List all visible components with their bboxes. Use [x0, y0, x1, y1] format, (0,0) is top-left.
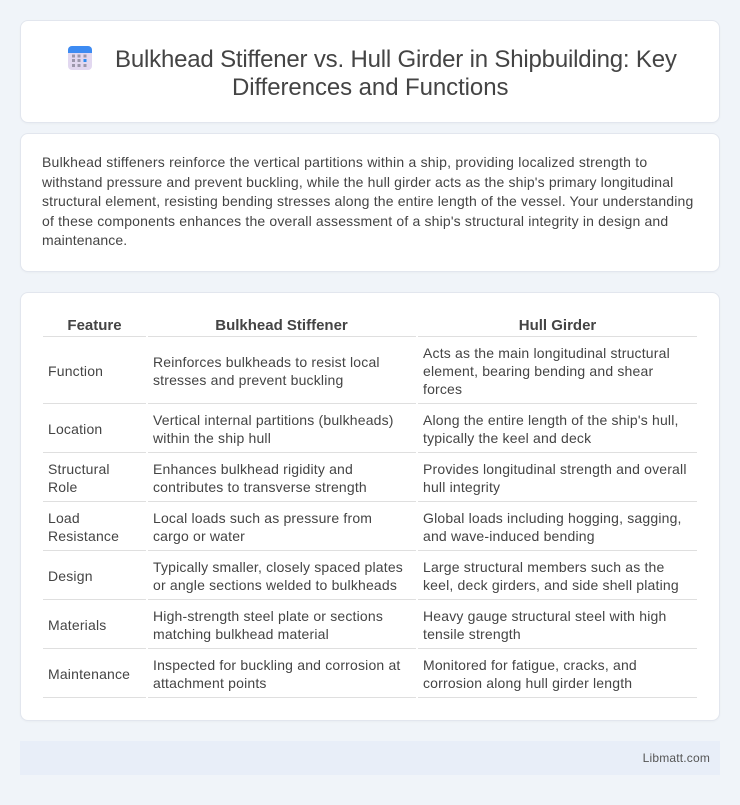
- row: materials: Materials: [48, 617, 106, 633]
- row: function: Reinforces bulkheads to resist local: [153, 354, 380, 370]
- intro text: maintenance.: [42, 232, 127, 248]
- row: function: element, bearing bending and shear: [423, 363, 653, 379]
- row: load resistance: cargo or water: [153, 528, 245, 544]
- intro text: [42, 154, 693, 248]
- row: load resistance: Global loads including hogging, sagging,: [423, 510, 682, 526]
- icon: calendar: [68, 46, 92, 70]
- row: maintenance: Inspected for buckling and corrosion at: [153, 657, 400, 673]
- row: materials: [48, 608, 666, 642]
- row: materials: tensile strength: [423, 626, 521, 642]
- row: structural role: [48, 461, 687, 495]
- row: function: Function: [48, 363, 103, 379]
- row: maintenance: attachment points: [153, 675, 267, 691]
- row: design: Large structural members such as the: [423, 559, 664, 575]
- row: location: Location: [48, 421, 102, 437]
- row: maintenance: corrosion along hull girder length: [423, 675, 632, 691]
- row: location: typically the keel and deck: [423, 430, 591, 446]
- intro card: [20, 133, 720, 272]
- row: load resistance: Resistance: [48, 528, 119, 544]
- row: design: [48, 559, 679, 593]
- row: design: or angle sections welded to bulkheads: [153, 577, 397, 593]
- comparison table card: [20, 292, 720, 721]
- row: location: within the ship hull: [153, 430, 271, 446]
- row: load resistance: [48, 510, 682, 544]
- footer bar: [20, 741, 720, 775]
- row: maintenance: Maintenance: [48, 666, 130, 682]
- row: structural role: Structural: [48, 461, 110, 477]
- row: load resistance: Load: [48, 510, 80, 526]
- row: location: [48, 412, 679, 446]
- row: structural role: contributes to transverse strength: [153, 479, 367, 495]
- table header: Bulkhead Stiffener: [215, 317, 348, 334]
- row: design: Typically smaller, closely spaced plates: [153, 559, 403, 575]
- intro text: Bulkhead stiffeners reinforce the vertical partitions within a ship, providing localized strength to: [42, 154, 647, 170]
- row: function: Acts as the main longitudinal structural: [423, 345, 670, 361]
- row: materials: Heavy gauge structural steel with high: [423, 608, 666, 624]
- intro text: withstand pressure and prevent buckling, while the hull girder acts as the ship's primary longitudinal: [42, 174, 673, 190]
- title: [115, 46, 677, 101]
- row: location: Vertical internal partitions (bulkheads): [153, 412, 394, 428]
- row: function: [48, 345, 670, 397]
- intro text: structural element, resisting bending stresses along the entire length of the vessel. Your understanding: [42, 193, 693, 209]
- row: function: stresses and prevent buckling: [153, 372, 343, 388]
- row: structural role: Role: [48, 479, 78, 495]
- row: load resistance: Local loads such as pressure from: [153, 510, 372, 526]
- row: design: Design: [48, 568, 93, 584]
- table header: [67, 317, 596, 334]
- row: structural role: Provides longitudinal strength and overall: [423, 461, 687, 477]
- header card: [20, 20, 720, 123]
- row: function: forces: [423, 381, 462, 397]
- row: materials: matching bulkhead material: [153, 626, 329, 642]
- table header: Feature: [67, 317, 122, 334]
- row: structural role: Enhances bulkhead rigidity and: [153, 461, 353, 477]
- row: design: keel, deck girders, and side shell plating: [423, 577, 679, 593]
- title: Differences and Functions: [232, 74, 508, 101]
- row: structural role: hull integrity: [423, 479, 500, 495]
- title: Bulkhead Stiffener vs. Hull Girder in Shipbuilding: Key: [115, 46, 677, 73]
- row: load resistance: and wave-induced bending: [423, 528, 595, 544]
- table header: Hull Girder: [519, 317, 596, 334]
- intro text: of these components enhances the overall assessment of a ship's structural integrity in design and: [42, 213, 668, 229]
- row: maintenance: Monitored for fatigue, cracks, and: [423, 657, 637, 673]
- footer text: Libmatt.com: [643, 751, 710, 765]
- row: maintenance: [48, 657, 637, 691]
- row: location: Along the entire length of the ship's hull,: [423, 412, 679, 428]
- row: materials: High-strength steel plate or sections: [153, 608, 383, 624]
